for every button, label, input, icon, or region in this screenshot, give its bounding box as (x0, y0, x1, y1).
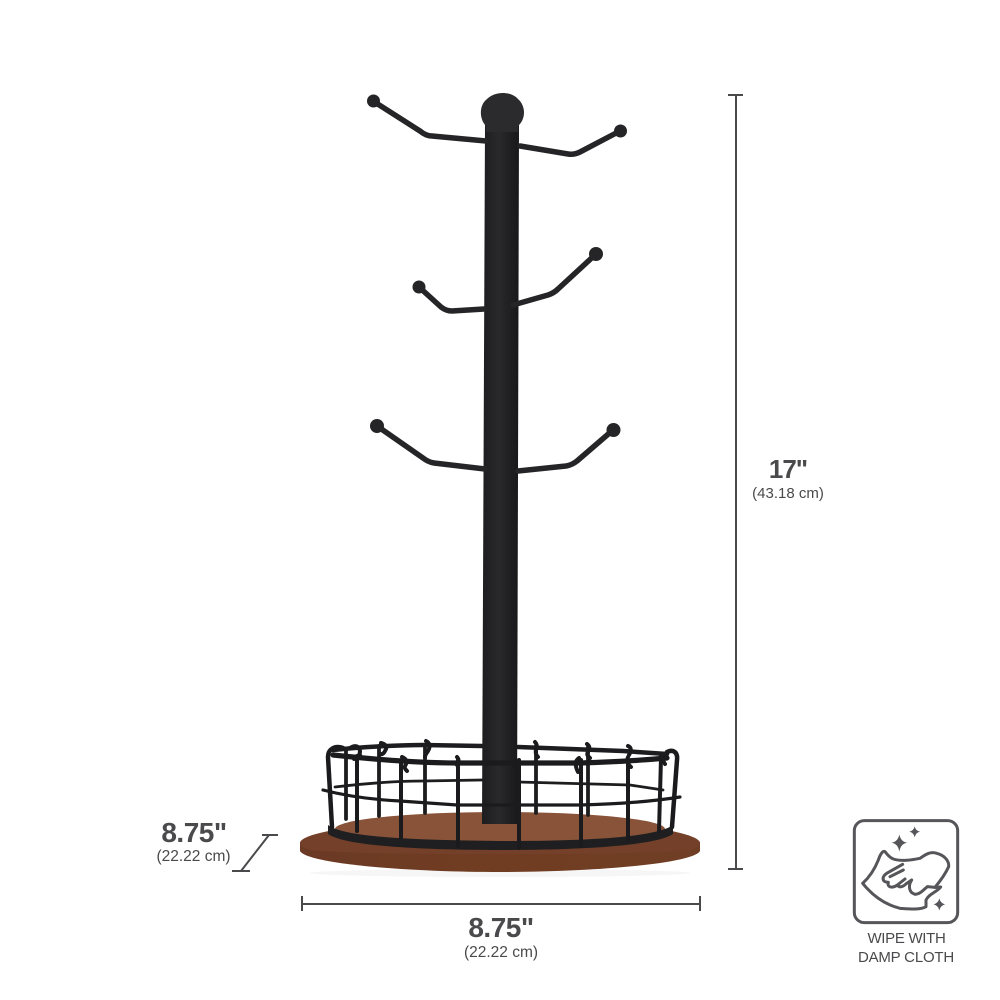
icon: wipe with damp cloth (854, 821, 958, 923)
icon caption: DAMP CLOTH (858, 949, 954, 966)
height dimension line (728, 95, 743, 869)
width label: (22.22 cm) (464, 944, 538, 961)
icon caption (858, 930, 954, 966)
width label (464, 912, 538, 961)
width label: 8.75" (468, 912, 534, 943)
front wire basket (323, 741, 680, 850)
central pole (481, 93, 524, 824)
height label: (43.18 cm) (752, 485, 824, 502)
lower hook right (518, 430, 613, 471)
depth dimension line (232, 835, 278, 871)
hook tips (367, 94, 627, 437)
depth label (156, 817, 231, 865)
middle hook left (419, 287, 484, 311)
depth label: 8.75" (161, 817, 227, 848)
height label (752, 454, 824, 502)
height label: 17" (769, 454, 807, 484)
middle hook right (513, 254, 596, 305)
depth label: (22.22 cm) (156, 848, 231, 865)
top hook right (520, 131, 620, 154)
icon caption: WIPE WITH (867, 930, 946, 947)
wooden base (300, 812, 700, 877)
back wire rails of basket (333, 745, 667, 819)
lower hook left (377, 426, 485, 469)
width dimension line (302, 896, 700, 911)
mug hooks (373, 101, 620, 471)
top hook left (373, 101, 486, 141)
